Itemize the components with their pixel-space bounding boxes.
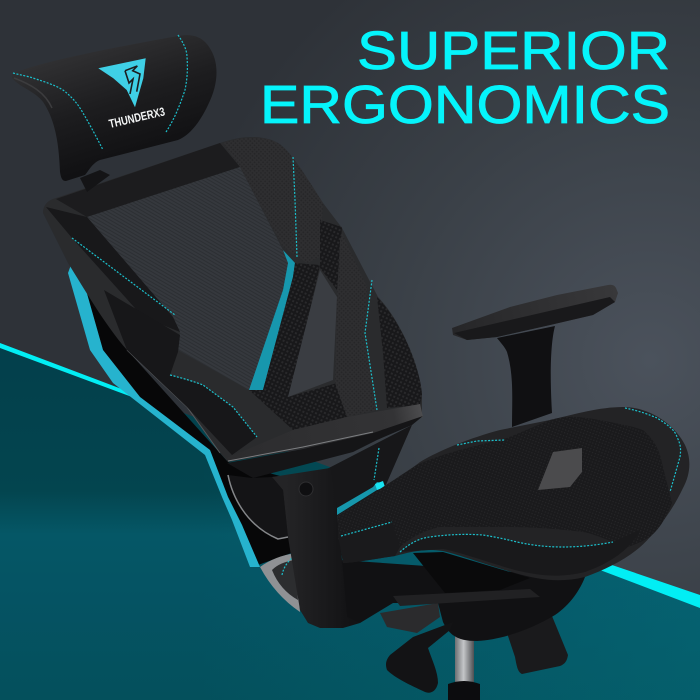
silver lower shell bbox=[260, 553, 300, 612]
back stitching bbox=[72, 157, 377, 437]
glowing floor line bbox=[0, 343, 700, 608]
dish stitching bbox=[282, 558, 292, 575]
headrest cushion bbox=[12, 35, 217, 181]
lumbar silver lip bbox=[228, 475, 288, 539]
inner lumbar shell bbox=[228, 475, 288, 539]
arm top surface bbox=[227, 404, 423, 462]
cyan inner strip bbox=[249, 250, 295, 390]
seat cushion bbox=[337, 407, 689, 580]
seat bbox=[337, 407, 689, 580]
headrest stitching bbox=[13, 35, 187, 150]
backrest frame bbox=[43, 137, 422, 462]
arm post knob bbox=[299, 482, 313, 496]
cyan rear shell strip bbox=[68, 262, 260, 567]
seat mesh bbox=[338, 417, 672, 550]
frame outer edge highlight bbox=[127, 350, 220, 453]
outer rough mesh bbox=[377, 297, 422, 408]
seat stitching bbox=[341, 408, 681, 552]
headrest bbox=[12, 35, 217, 181]
mechanism gray strip bbox=[393, 589, 540, 606]
right armrest bbox=[452, 285, 618, 427]
stitching below arm bbox=[374, 448, 379, 480]
left arm post bbox=[272, 468, 360, 628]
gray mechanism block bbox=[380, 603, 440, 633]
rear left seat panel bbox=[338, 522, 400, 563]
teal floor bbox=[0, 345, 700, 700]
left armrest bbox=[227, 404, 423, 496]
gray triangle panel bbox=[288, 270, 337, 397]
logo mark bbox=[98, 58, 146, 107]
arm lower face bbox=[227, 416, 423, 478]
chair backrest assembly bbox=[43, 137, 422, 612]
mechanism body bbox=[340, 560, 585, 641]
bright sliver tip bbox=[375, 481, 385, 490]
title line 1: SUPERIOR bbox=[357, 21, 670, 81]
under-seat mechanism bbox=[340, 552, 585, 700]
gas cylinder bbox=[455, 632, 474, 688]
dark mesh panel bbox=[249, 263, 347, 430]
title line 2: ERGONOMICS bbox=[260, 75, 670, 135]
arm highlight bbox=[228, 432, 373, 461]
carbon top panel bbox=[223, 138, 323, 263]
inner shell dish bbox=[272, 560, 298, 600]
lower back under armrest bbox=[325, 425, 412, 530]
cyan shell sliver under back bbox=[337, 482, 385, 515]
left dark wedge bbox=[46, 207, 180, 332]
seat bracket bbox=[413, 552, 530, 593]
gray seat patch bbox=[538, 448, 582, 490]
right arm pad underside bbox=[454, 297, 615, 340]
headrest support post bbox=[80, 170, 110, 192]
lower rough mesh bbox=[104, 290, 257, 455]
tilt lever bbox=[386, 622, 453, 693]
headrest tip highlight bbox=[14, 78, 52, 108]
right arm post bbox=[497, 326, 555, 427]
cylinder base bbox=[448, 681, 480, 700]
lower bolster bbox=[400, 530, 640, 576]
central mesh bbox=[87, 167, 288, 390]
adjustment knob bbox=[506, 616, 568, 674]
logo wordmark: THUNDERX3 bbox=[108, 104, 166, 131]
upper rough mesh bbox=[320, 220, 342, 290]
right arm pad bbox=[452, 285, 618, 340]
top dark strip bbox=[56, 143, 240, 217]
title bbox=[260, 21, 670, 135]
carbon side panel bbox=[335, 233, 377, 417]
black rear gap bbox=[84, 283, 300, 565]
